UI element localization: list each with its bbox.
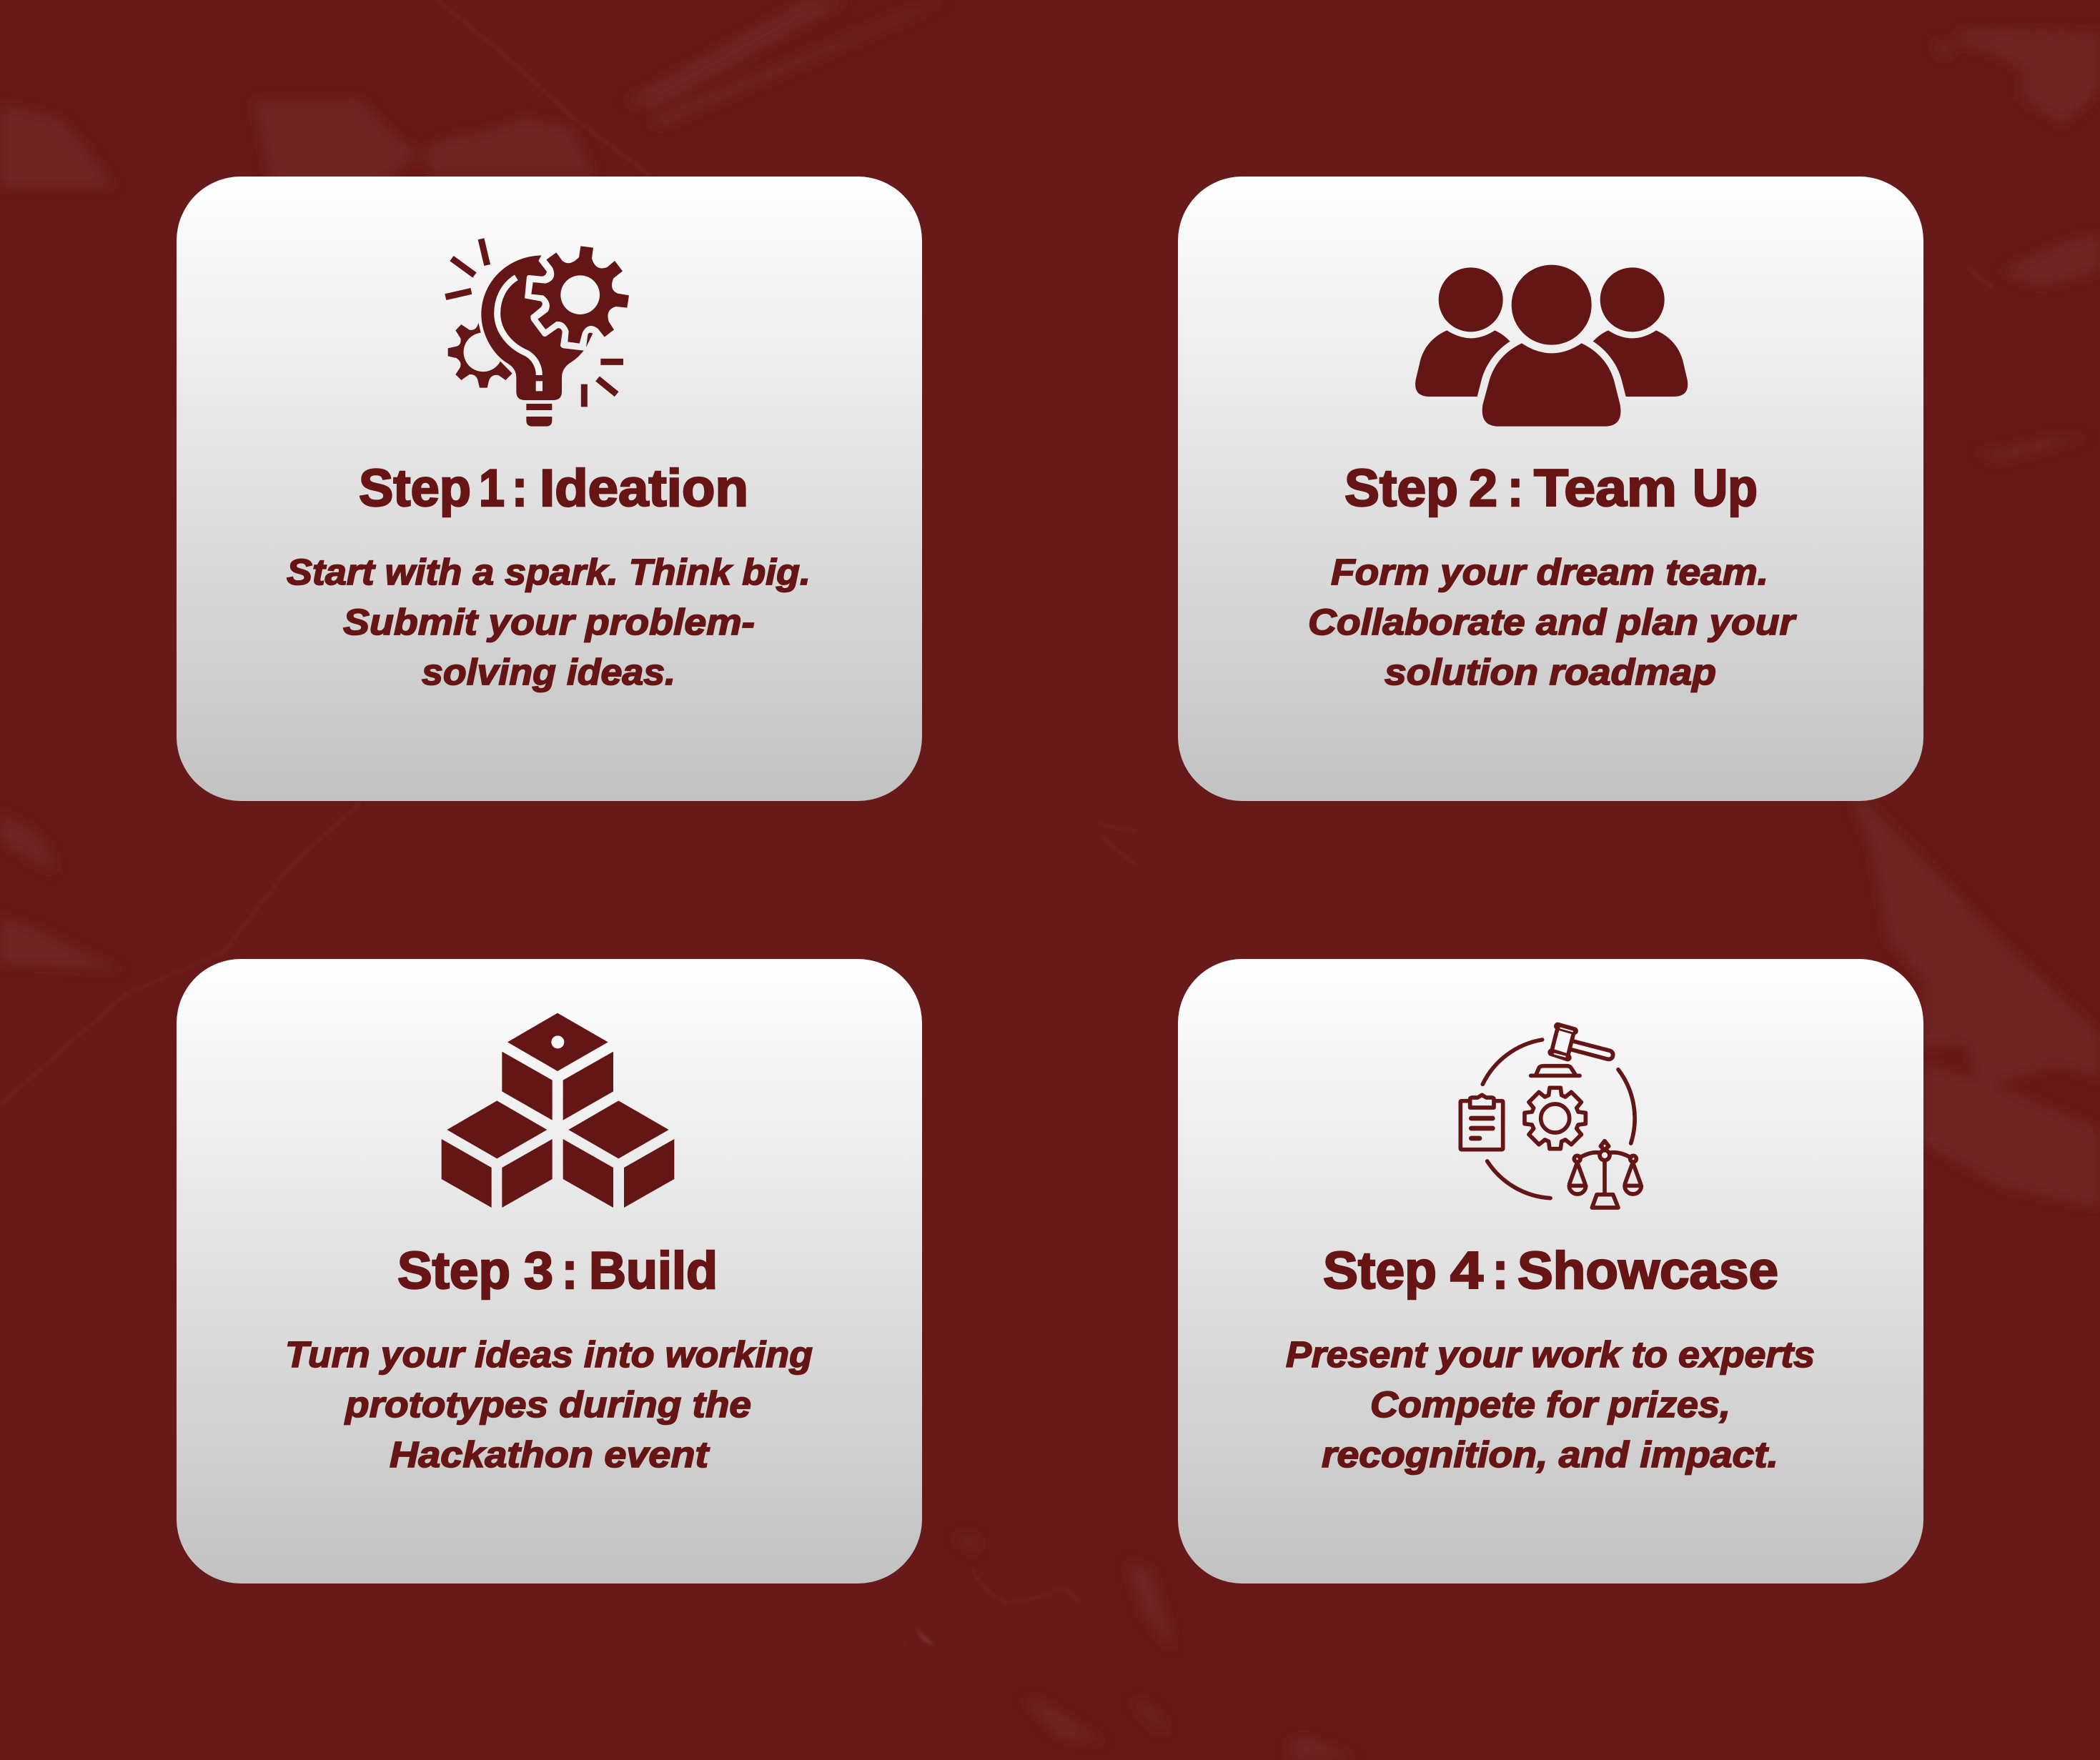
text block: step 1 description: Submit your problem- <box>343 602 755 642</box>
heading: step 1: Ideation <box>540 459 748 517</box>
heading: step 3: 3 <box>524 1242 553 1300</box>
heading: step 2: Team <box>1534 459 1677 517</box>
text block: step 2 description: Collaborate and plan your <box>1308 602 1797 642</box>
heading: step 1: Step <box>359 459 471 517</box>
heading: step 2 <box>1344 459 1758 517</box>
text block: step 3 description: Hackathon event <box>390 1434 710 1475</box>
icon: stacked cubes <box>442 1013 674 1208</box>
heading: step 2: : <box>1507 459 1523 517</box>
text block: step 4 description: Compete for prizes, <box>1370 1384 1730 1425</box>
text block: step 4 description <box>1286 1334 1815 1475</box>
heading: step 2: 2 <box>1469 459 1497 517</box>
text block: step 1 description: Start with a spark. Think big. <box>287 552 811 592</box>
heading: step 4: Showcase <box>1517 1242 1778 1300</box>
text block: step 3 description: Turn your ideas into working <box>285 1334 813 1375</box>
heading: step 1: : <box>512 459 528 517</box>
text block: step 2 description <box>1308 552 1797 692</box>
heading: step 3: : <box>562 1242 578 1300</box>
text block: step 4 description: recognition, and impact. <box>1322 1434 1778 1475</box>
heading: step 1 <box>359 459 748 517</box>
text block: step 3 description: prototypes during the <box>344 1384 751 1425</box>
heading: step 3: Build <box>589 1242 718 1300</box>
heading: step 3 <box>397 1242 718 1300</box>
heading: step 4: : <box>1492 1242 1508 1300</box>
text block: step 2 description: solution roadmap <box>1385 652 1716 692</box>
icon: light bulb with gears <box>445 239 629 427</box>
heading: step 4: 4 <box>1450 1242 1483 1300</box>
panel: step 2 team up <box>1178 177 1923 801</box>
icon: gavel, gear, clipboard and scales <box>1460 1026 1641 1208</box>
heading: step 2: Step <box>1344 459 1458 517</box>
panel: step 3 build <box>177 959 922 1583</box>
panel: step 1 ideation <box>177 177 922 801</box>
text block: step 3 description <box>285 1334 813 1475</box>
text block: step 1 description <box>287 552 811 692</box>
text block: step 2 description: Form your dream team. <box>1331 552 1768 592</box>
icon: team of three people <box>1415 265 1688 427</box>
heading: step 4 <box>1323 1242 1778 1300</box>
text block: step 1 description: solving ideas. <box>422 652 675 692</box>
heading: step 3: Step <box>397 1242 510 1300</box>
text block: step 4 description: Present your work to experts <box>1286 1334 1815 1375</box>
heading: step 4: Step <box>1323 1242 1437 1300</box>
heading: step 1: 1 <box>479 459 505 517</box>
panel: step 4 showcase <box>1178 959 1923 1583</box>
heading: step 2: Up <box>1693 459 1758 517</box>
